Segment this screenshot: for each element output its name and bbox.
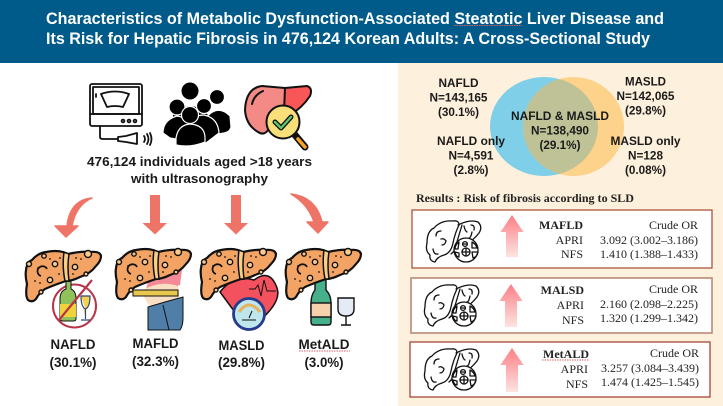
venn labels: N=128 [628,148,663,162]
icon: heart with blood-pressure gauge [220,276,278,330]
title: Characteristics of Metabolic Dysfunction-Associated Steatotic Liver Disease and [46,10,664,28]
MetALD odds ratios: MetALD [543,347,589,361]
icon: ultrasound machine [90,84,152,145]
label: NAFLD: (30.1%) [50,355,96,370]
MALSD odds ratios: MALSD [541,283,584,297]
panel: MALSD risk [411,278,712,333]
arrow: to NAFLD [55,198,92,237]
study population text: with ultrasonography [130,171,269,186]
study population text [87,154,312,186]
MALSD odds ratios: NFS [562,313,584,327]
venn labels: MASLD [625,74,666,88]
title: Its Risk for Hepatic Fibrosis in 476,124 Korean Adults: A Cross-Sectional Study [46,30,651,48]
MetALD odds ratios: 3.257 (3.084–3.439) [601,361,699,375]
arrow: risk increase [500,348,524,392]
arrow: risk increase [500,215,524,257]
panel: MetALD risk [410,342,710,397]
panel: MAFLD category [116,248,191,369]
panel: results background [398,63,723,406]
results heading: Results : Risk of fibrosis according to SLD [416,191,634,205]
MAFLD odds ratios: 1.410 (1.388–1.433) [600,247,698,261]
icon: liver outline [424,285,479,326]
venn labels: (29.8%) [625,104,666,118]
icon: liver outline [424,349,479,390]
MetALD odds ratios: Crude OR [650,346,699,360]
venn labels: N=4,591 [448,148,494,162]
MetALD odds ratios: 1.474 (1.425–1.545) [601,375,699,389]
label: NAFLD: NAFLD [50,337,96,352]
venn diagram [430,74,681,177]
icon: no alcohol [53,280,96,328]
icon: waist and measuring tape [133,270,183,330]
venn labels: N=143,165 [430,90,488,104]
icon: liver under magnifying glass [245,86,311,147]
label: MASLD [218,338,265,370]
title [46,10,664,48]
icon: fatty liver [116,248,191,299]
label: MAFLD: (32.3%) [132,354,179,369]
venn labels: N=142,065 [616,89,675,103]
venn labels [430,74,681,177]
label: MASLD: MASLD [218,338,265,353]
venn labels: NAFLD & MASLD [511,109,609,123]
venn labels: (2.8%) [454,163,489,177]
MAFLD odds ratios: Crude OR [649,218,698,232]
MAFLD odds ratios: 3.092 (3.002–3.186) [600,233,698,247]
MetALD odds ratios: NFS [566,377,588,391]
MALSD odds ratios: 1.320 (1.299–1.342) [600,311,698,325]
icon: fatty liver [26,250,101,301]
venn labels: MASLD only [610,134,681,148]
MAFLD odds ratios [539,218,698,261]
MetALD odds ratios [542,346,699,391]
panel: MetALD category [286,248,361,370]
icon: fatty liver [286,248,361,299]
MAFLD odds ratios: NFS [561,247,583,261]
icon: liver outline [426,221,481,262]
icon: crowd of people [163,82,231,146]
MALSD odds ratios: APRI [557,298,584,312]
label: MetALD: (3.0%) [304,355,344,370]
label: MASLD: (29.8%) [218,355,265,370]
venn labels: N=138,490 [531,124,589,138]
MetALD odds ratios: APRI [561,362,588,376]
arrow: to MASLD [224,195,248,234]
venn labels: (30.1%) [438,105,479,119]
panel: MASLD category [201,248,278,370]
icon: fatty liver [201,248,276,299]
venn labels: NAFLD only [437,134,505,148]
label: MAFLD [132,336,179,369]
arrow: risk increase [500,284,522,327]
MAFLD odds ratios: APRI [556,233,583,247]
MAFLD odds ratios: MAFLD [539,218,583,232]
label: NAFLD [50,337,96,370]
panel: MAFLD risk [412,210,712,268]
MALSD odds ratios [541,282,698,327]
arrow: to MAFLD [142,195,167,234]
MALSD odds ratios: Crude OR [649,282,698,296]
label: MetALD: MetALD [298,337,350,352]
label: MAFLD: MAFLD [132,336,179,351]
venn labels: (29.1%) [540,138,581,152]
panel: NAFLD category [26,250,101,370]
study population text: 476,124 individuals aged >18 years [87,154,312,169]
label: MetALD [298,337,350,370]
arrow: to MetALD [291,194,328,233]
MALSD odds ratios: 2.160 (2.098–2.225) [600,297,698,311]
venn labels: NAFLD [438,76,479,90]
venn labels: (0.08%) [625,163,666,177]
icon: wine bottle and glass [311,277,354,325]
header banner [0,0,723,63]
panel: study population [87,82,312,186]
